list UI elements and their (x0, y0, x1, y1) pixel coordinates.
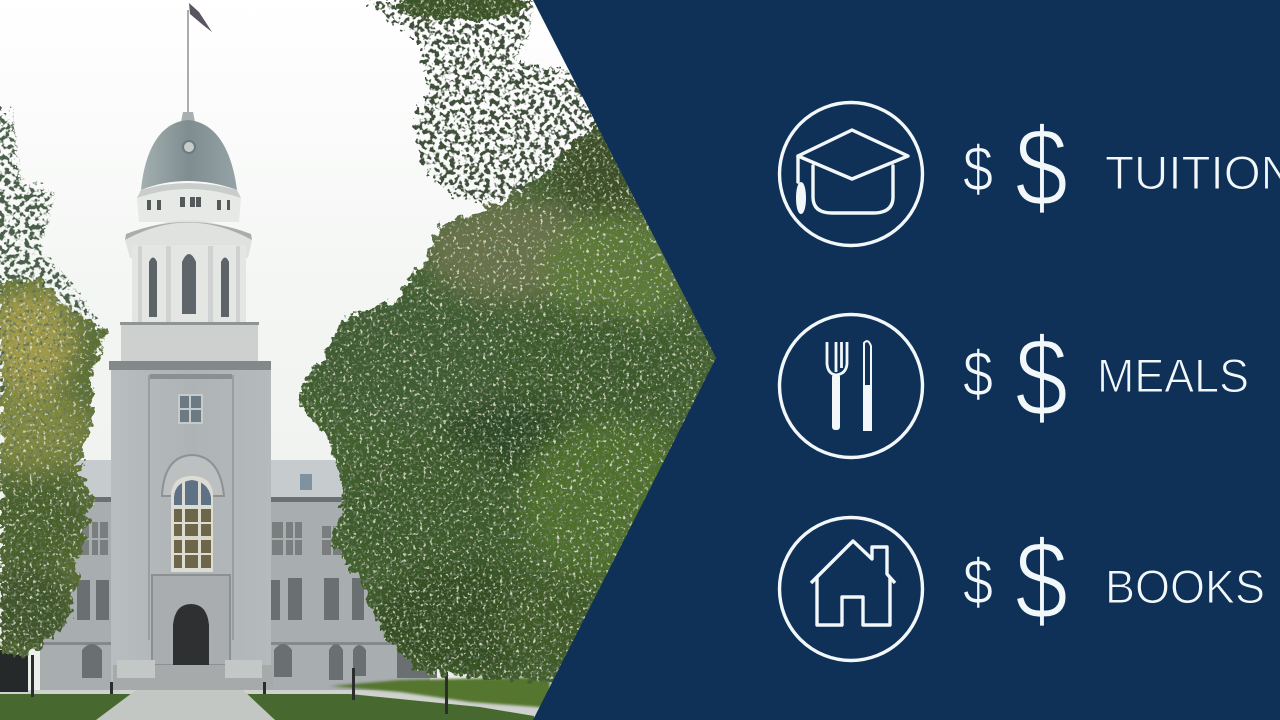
arched main window (162, 455, 224, 572)
large dollar sign: $ (1015, 105, 1068, 230)
row: tuition (780, 102, 1280, 246)
label: meals: MEALS (1097, 349, 1249, 402)
small dollar sign: $ (963, 338, 993, 410)
tree: top overhang (368, 0, 640, 200)
tree: large right tree (290, 100, 730, 690)
row: meals (780, 314, 1249, 458)
small dollar sign: $ (963, 546, 993, 618)
building wings (40, 460, 437, 690)
cupola dome (141, 112, 237, 190)
sky (0, 0, 740, 720)
icon: graduation cap (780, 102, 922, 246)
large dollar sign: $ (1015, 315, 1068, 440)
large dollar sign: $ (1015, 518, 1068, 643)
cupola drum and tower top (109, 183, 271, 370)
flag and pole (187, 3, 212, 114)
label: books: BOOKS (1105, 560, 1265, 613)
icon: fork and knife (780, 314, 922, 458)
small dollar sign: $ (963, 133, 993, 205)
tree: left tree (0, 110, 110, 670)
photo: campus building with trees (0, 0, 740, 720)
navy chevron panel (533, 0, 1280, 720)
tower window (178, 394, 203, 424)
entrance (113, 575, 273, 690)
row: books (780, 518, 1265, 660)
icon: house (780, 518, 922, 660)
lawn and path (0, 650, 560, 720)
central tower (111, 370, 273, 690)
